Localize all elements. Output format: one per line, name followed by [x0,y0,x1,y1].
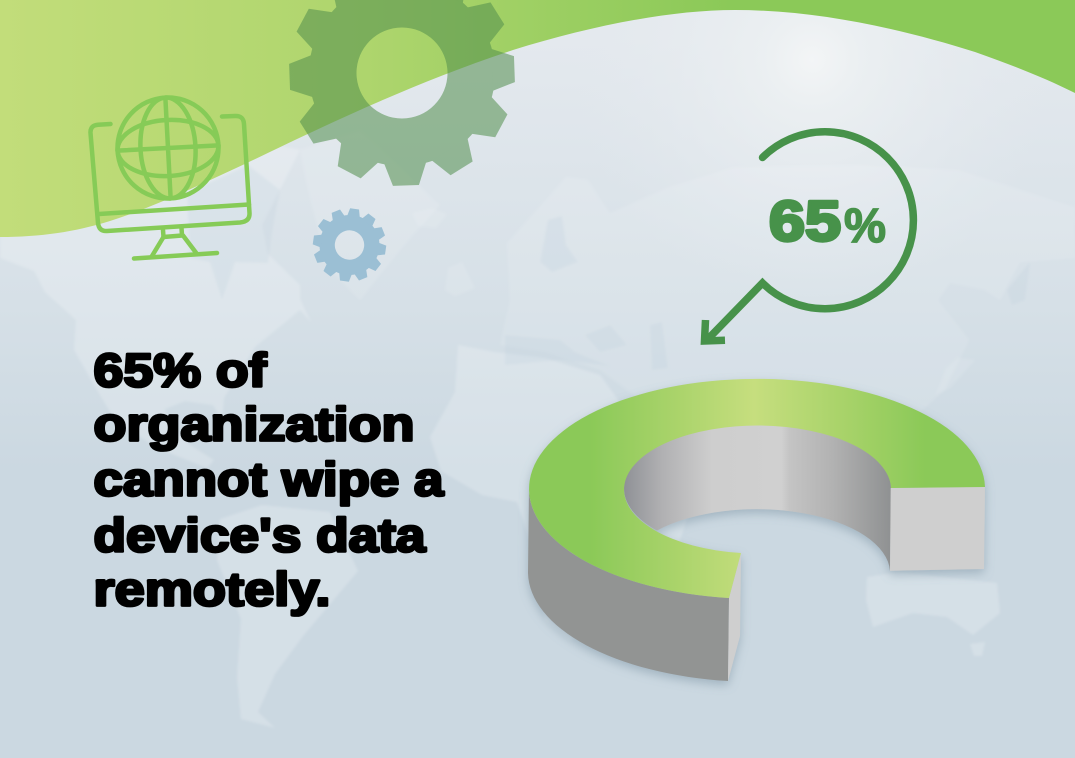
headline text [94,344,444,616]
headline text: remotely. [94,562,330,616]
icon: large gear [250,0,554,225]
icon: small blue gear [308,204,391,286]
top face [529,379,985,598]
globe [115,95,221,201]
world map [0,130,1075,728]
right cut face [890,487,985,571]
3D ring chart: 65 percent [528,379,985,681]
headline text: cannot wipe a [94,452,444,506]
percent sign: % [844,200,886,253]
headline text: organization [94,398,414,450]
headline text: 65% of [94,344,267,396]
icon: monitor with globe [90,95,250,258]
circular arrow [704,132,913,341]
monitor screen and stand [90,116,250,258]
headline text: device's data [94,508,426,562]
green wave header [0,0,1075,237]
outer wall [528,487,729,681]
inner wall [624,424,891,571]
65 value: 65 [769,190,841,254]
near cut face [728,553,741,681]
